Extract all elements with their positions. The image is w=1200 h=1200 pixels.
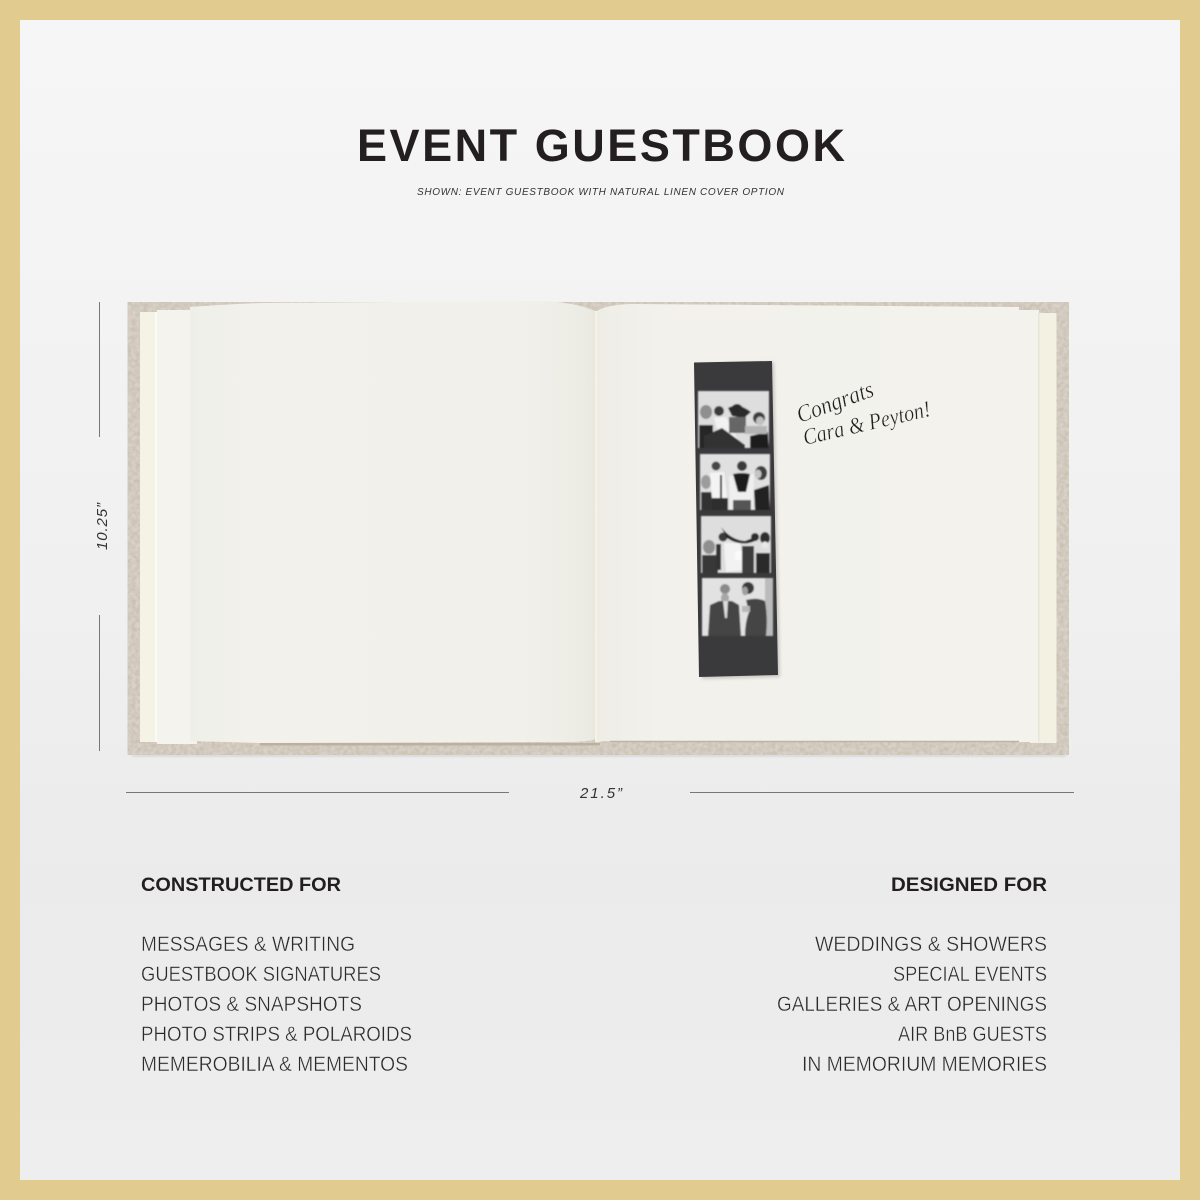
photo 3 bbox=[701, 516, 771, 573]
list: designed for: WEDDINGS & SHOWERS bbox=[815, 933, 1047, 956]
note line two: Cara & Peyton! bbox=[801, 396, 933, 450]
list: constructed for: MEMEROBILIA & MEMENTOS bbox=[141, 1053, 408, 1076]
spine shadow band bbox=[260, 743, 600, 746]
gutter bbox=[595, 311, 597, 742]
list: constructed for: MESSAGES & WRITING bbox=[141, 933, 355, 956]
photo strip bbox=[694, 361, 780, 679]
photo 1 bbox=[698, 391, 769, 448]
panel: constructed for bbox=[141, 875, 412, 1076]
photo 2 bbox=[700, 454, 770, 510]
page bottom edge shadow bbox=[610, 740, 1019, 742]
book shadow bbox=[132, 753, 1066, 757]
heading: designed for: DESIGNED FOR bbox=[891, 875, 1047, 896]
list: designed for: IN MEMORIUM MEMORIES bbox=[802, 1053, 1047, 1076]
heading: constructed for: CONSTRUCTED FOR bbox=[141, 875, 341, 896]
list: constructed for: GUESTBOOK SIGNATURES bbox=[141, 963, 381, 986]
width label: 21.5” bbox=[579, 785, 623, 802]
list: designed for: GALLERIES & ART OPENINGS bbox=[777, 993, 1047, 1016]
right page bbox=[597, 304, 1020, 743]
width lines bbox=[126, 792, 1074, 794]
panel: designed for bbox=[777, 875, 1047, 1076]
strip shadow bbox=[696, 362, 780, 679]
height label: 10.25” bbox=[94, 502, 111, 550]
list: constructed for: PHOTOS & SNAPSHOTS bbox=[141, 993, 362, 1016]
list: designed for: AIR BnB GUESTS bbox=[898, 1023, 1047, 1046]
left page bbox=[190, 301, 595, 743]
list: constructed for: PHOTO STRIPS & POLAROIDS bbox=[141, 1023, 412, 1046]
linen cover bbox=[128, 302, 1069, 755]
left page stack bbox=[140, 310, 197, 744]
strip paper bbox=[694, 361, 778, 677]
handwritten note bbox=[793, 377, 933, 450]
height lines bbox=[98, 302, 100, 751]
list: designed for bbox=[777, 933, 1047, 1076]
list: constructed for bbox=[141, 933, 412, 1076]
title: EVENT GUESTBOOK bbox=[357, 120, 846, 171]
photo 4 bbox=[702, 578, 773, 636]
right page stack bbox=[1019, 310, 1056, 743]
subtitle: SHOWN: EVENT GUESTBOOK WITH NATURAL LINEN COVER OPTION bbox=[417, 187, 785, 198]
open guestbook bbox=[128, 301, 1069, 757]
note line one: Congrats bbox=[793, 377, 877, 429]
list: designed for: SPECIAL EVENTS bbox=[893, 963, 1047, 986]
